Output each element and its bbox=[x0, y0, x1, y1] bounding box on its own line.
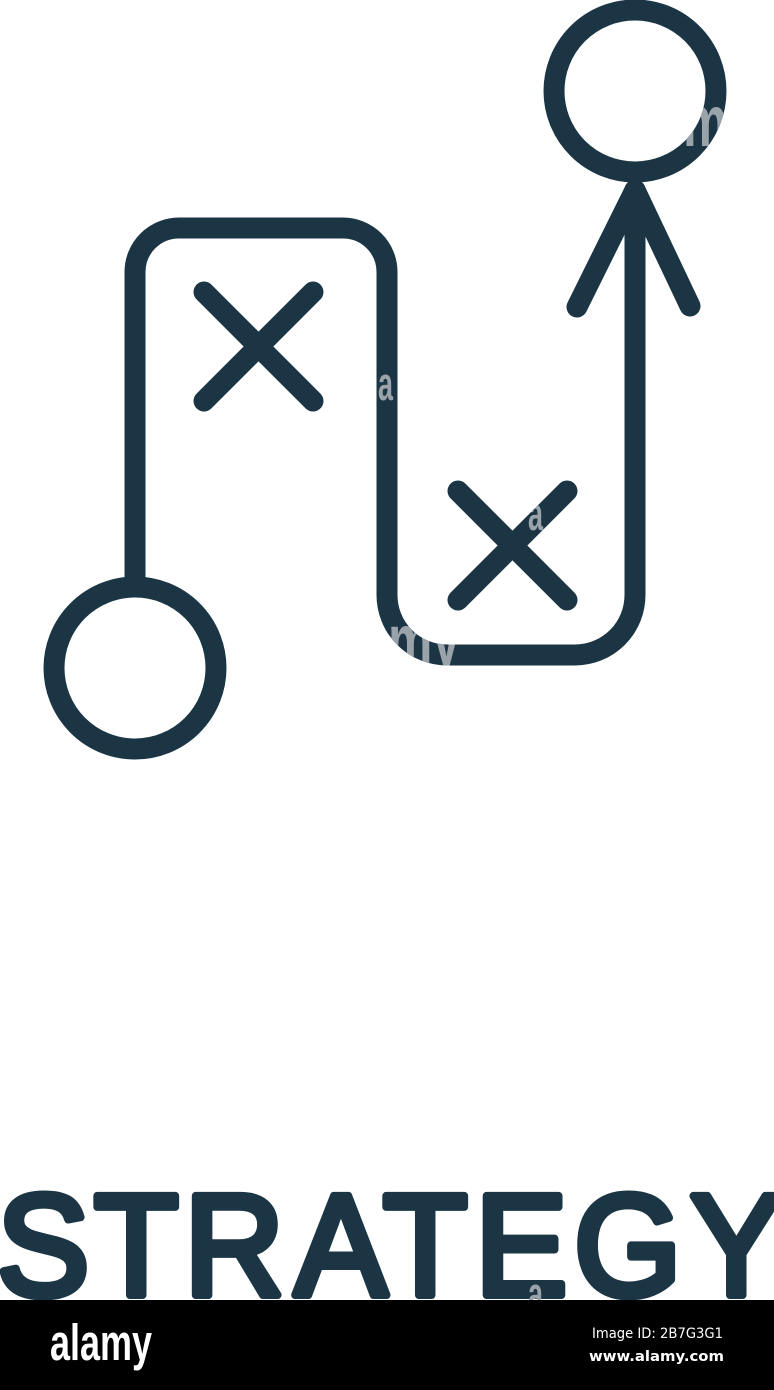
icon: start circle bbox=[54, 587, 216, 749]
icon: upper cross bbox=[204, 292, 313, 401]
watermark fragments on icon: my bbox=[388, 601, 460, 681]
footer bar bbox=[0, 1300, 774, 1390]
arrow head bbox=[577, 190, 690, 307]
footer logo: alamy bbox=[50, 1314, 152, 1371]
route path bbox=[135, 190, 635, 655]
watermark fragments on icon bbox=[378, 107, 724, 666]
icon: strategy route bbox=[54, 10, 716, 749]
watermark fragments on icon: a bbox=[528, 487, 543, 540]
image id: Image ID: 2B7G3G1 bbox=[592, 1326, 723, 1342]
watermark fragments on icon: a bbox=[378, 357, 393, 410]
title: STRATEGY bbox=[0, 1164, 774, 1326]
icon: goal circle bbox=[554, 10, 716, 172]
watermark fragment on title: a bbox=[528, 1267, 543, 1320]
icon: lower cross bbox=[458, 491, 567, 600]
website: www.alamy.com bbox=[589, 1349, 724, 1365]
